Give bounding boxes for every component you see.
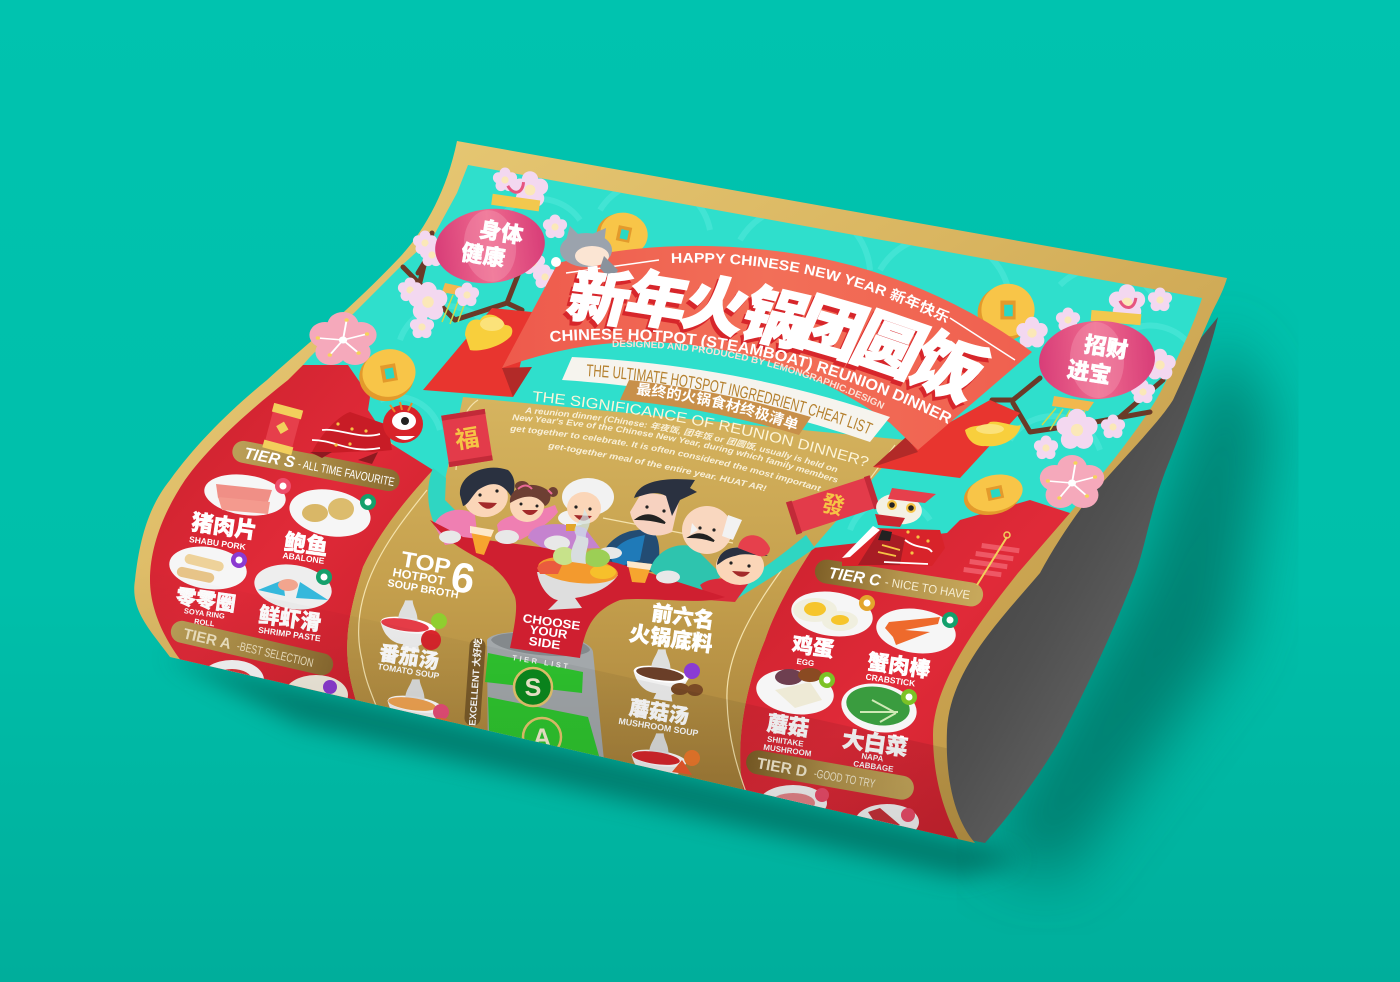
poster shadow bbox=[165, 330, 1270, 880]
label: soya ring roll: 零零圈 bbox=[174, 580, 238, 617]
heading: top 6 bbox=[388, 551, 474, 598]
title: Chinese characters: 圆 bbox=[839, 288, 945, 395]
body text: New Year's Eve of the Chinese New Year, during which family members bbox=[512, 414, 838, 482]
soup: mushroom: 蘑菇汤 bbox=[627, 692, 691, 730]
banner rules bbox=[566, 260, 1015, 360]
subtitle: CHINESE HOTPOT (STEAMBOAT) REUNION DINNER bbox=[550, 328, 952, 424]
label: soya ring roll bbox=[176, 586, 236, 626]
label: shrimp paste: 鲜虾滑 bbox=[257, 599, 323, 637]
lantern tassel: right bbox=[1042, 396, 1094, 432]
label: napa cabbage: 大白菜 bbox=[840, 722, 910, 763]
label: egg: 鸡蛋 bbox=[790, 628, 836, 664]
choose your side bbox=[522, 611, 581, 652]
lantern text: health bbox=[459, 212, 526, 273]
panel: right red tier list bbox=[740, 500, 1070, 842]
label: soya ring roll: ROLL bbox=[194, 617, 215, 628]
label: soya ring roll: SOYA RING bbox=[183, 606, 225, 621]
tan strip bbox=[620, 380, 811, 435]
tier S pill: - ALL TIME FAVOURITE bbox=[297, 457, 396, 489]
label: napa cabbage bbox=[842, 728, 908, 772]
label: shabu pork: SHABU PORK bbox=[188, 534, 247, 552]
gold border bbox=[134, 141, 1227, 843]
title: Chinese characters: 锅 bbox=[730, 264, 823, 363]
tier D pill: TIER D bbox=[755, 755, 808, 781]
tier C pill: TIER C bbox=[827, 565, 882, 590]
plate: napa cabbage bbox=[841, 684, 917, 732]
label: shrimp paste: SHRIMP PASTE bbox=[258, 625, 322, 643]
choose your side: SIDE bbox=[528, 634, 561, 652]
family bbox=[434, 468, 770, 602]
funnel and table bbox=[430, 520, 725, 658]
person: girl bbox=[497, 481, 558, 540]
firecracker bbox=[262, 403, 303, 455]
heading: significance: THE SIGNIFICANCE OF REUNION DINNER? bbox=[533, 391, 869, 466]
plate: egg bbox=[791, 592, 875, 636]
panel: teal header bbox=[303, 165, 1202, 560]
scroll: fa: 發 bbox=[819, 490, 847, 520]
scroll: fu: 福 bbox=[453, 424, 481, 455]
scale pattern bbox=[380, 181, 1190, 530]
soup: pumpkin bbox=[387, 679, 452, 722]
hotpot bbox=[537, 508, 619, 610]
plate: tier A partial bbox=[209, 660, 348, 698]
teal bowl rim right bbox=[737, 535, 815, 599]
lantern: right bbox=[1036, 297, 1157, 402]
soup: mushroom: MUSHROOM SOUP bbox=[618, 716, 699, 738]
plate: shrimp paste bbox=[254, 564, 332, 610]
excellent label: EXCELLENT 大好吃 bbox=[466, 637, 485, 726]
title: Chinese characters: 新 bbox=[560, 248, 642, 340]
soup: tomato bbox=[377, 600, 447, 681]
lantern text: health: 健康 bbox=[459, 235, 508, 273]
label: abalone: 鲍鱼 bbox=[282, 524, 330, 562]
blossoms bbox=[309, 168, 1176, 508]
person: father bbox=[600, 479, 697, 572]
tier list can: TIER LIST bbox=[512, 653, 571, 671]
body text: get-together meal of the entire year. HUAT AR! bbox=[548, 444, 767, 492]
person: boy bbox=[700, 535, 770, 602]
soup: tomato: 番茄汤 bbox=[377, 637, 441, 675]
lantern text: fortune: 进宝 bbox=[1065, 352, 1114, 390]
white strip bbox=[562, 357, 890, 442]
curled back of poster bbox=[925, 317, 1218, 843]
heading: top 6 chinese bbox=[628, 602, 713, 654]
tier D pill: -GOOD TO TRY bbox=[813, 766, 876, 791]
soup: tomato: TOMATO SOUP bbox=[377, 661, 440, 681]
cat bbox=[551, 226, 618, 283]
label: crabstick: CRABSTICK bbox=[865, 672, 917, 689]
tier A pill: -BEST SELECTION bbox=[236, 639, 315, 670]
label: shiitake: MUSHROOM bbox=[763, 743, 812, 758]
tier D pill bbox=[744, 748, 916, 802]
plate: crabstick bbox=[876, 608, 958, 654]
tier list can bbox=[485, 632, 605, 770]
tier A badge: A bbox=[533, 724, 551, 752]
plate: shabu pork bbox=[204, 474, 291, 516]
label: napa cabbage: CABBAGE bbox=[853, 759, 895, 774]
label: shiitake: 蘑菇 bbox=[765, 707, 811, 743]
white strip text: THE ULTIMATE HOTSPOT INGREDRIENT CHEAT LIST bbox=[586, 364, 874, 434]
lion left bbox=[310, 402, 423, 464]
poster bbox=[134, 141, 1227, 843]
title: Chinese characters bbox=[560, 248, 1008, 419]
person: grandfather bbox=[650, 506, 742, 597]
tier A pill bbox=[169, 619, 335, 677]
roll shading bbox=[100, 560, 1000, 860]
firecracker string bbox=[963, 532, 1020, 585]
teal bowl rim left bbox=[428, 468, 455, 522]
label: shiitake bbox=[764, 712, 812, 756]
heading: top 6: 6 bbox=[447, 553, 479, 603]
soup: mushroom bbox=[618, 649, 703, 738]
person: grandmother bbox=[528, 478, 614, 550]
title: Chinese characters: 火 bbox=[672, 253, 763, 350]
scroll: fu bbox=[441, 409, 493, 467]
lantern text: health: 身体 bbox=[477, 212, 526, 250]
tier S pill: TIER S bbox=[242, 445, 297, 472]
coin: lower left bbox=[355, 345, 420, 405]
label: crabstick: 蟹肉棒 bbox=[866, 646, 932, 684]
title: Chinese characters: 年 bbox=[617, 250, 701, 343]
coin: lower right bbox=[960, 470, 1027, 520]
body text: A reunion dinner (Chinese: 年夜饭, 团年饭 or 团圆饭, usually is held on bbox=[524, 408, 838, 472]
label: napa cabbage: NAPA bbox=[861, 752, 884, 764]
label: abalone: ABALONE bbox=[282, 550, 325, 566]
branches bbox=[403, 233, 1163, 432]
title banner bbox=[502, 246, 1032, 450]
gold ingot left bbox=[465, 315, 512, 350]
tier C pill bbox=[813, 558, 985, 608]
gold ingot right bbox=[965, 422, 1021, 446]
label: egg: EGG bbox=[796, 657, 815, 668]
plate: soya ring roll bbox=[169, 546, 247, 590]
tier S pill bbox=[230, 439, 402, 493]
coin: top left bbox=[592, 208, 652, 263]
heading: top 6 chinese: 前六名 bbox=[650, 597, 716, 635]
tan strip text: 最终的火锅食材终极清单 bbox=[636, 382, 798, 430]
lantern: left bbox=[429, 181, 549, 289]
tier S badge: S bbox=[525, 674, 541, 702]
tier C pill: - NICE TO HAVE bbox=[884, 575, 971, 602]
panel: left red tier list bbox=[150, 365, 433, 704]
tier A pill: TIER A bbox=[182, 625, 233, 653]
person: mother bbox=[434, 468, 515, 545]
label: shabu pork: 猪肉片 bbox=[189, 505, 259, 546]
lantern tassel: left bbox=[434, 283, 478, 324]
lion right bbox=[842, 488, 945, 566]
title: Chinese characters: 团 bbox=[784, 272, 884, 375]
tableware bbox=[439, 526, 680, 584]
label: shiitake: SHIITAKE bbox=[767, 735, 805, 749]
plate: abalone bbox=[289, 489, 376, 537]
ribbon tail right bbox=[873, 400, 1020, 478]
soup: spicy bbox=[631, 733, 700, 775]
heading: top 6: TOP bbox=[399, 546, 453, 580]
lantern text: fortune bbox=[1065, 327, 1131, 390]
heading: happy new year: HAPPY CHINESE NEW YEAR 新年快乐 bbox=[672, 253, 950, 323]
choose your side: YOUR bbox=[529, 622, 569, 642]
scroll: fa bbox=[786, 475, 880, 535]
heading: top 6: SOUP BROTH bbox=[386, 577, 459, 601]
heading: top 6: HOTPOT bbox=[391, 565, 447, 588]
choose your side: CHOOSE bbox=[522, 611, 581, 633]
body text: get together to celebrate. It is often considered the most important bbox=[510, 426, 822, 492]
title: Chinese characters: 饭 bbox=[894, 307, 1008, 419]
credit line: DESIGNED AND PRODUCED BY LEMONGRAPHIC.DESIGN bbox=[612, 340, 885, 409]
lantern text: fortune: 招财 bbox=[1082, 327, 1131, 365]
ribbon tail left bbox=[423, 308, 532, 397]
plate: tier D partial bbox=[759, 785, 919, 840]
panel: central gold bbox=[347, 397, 906, 797]
plate: shiitake bbox=[756, 668, 835, 714]
coin: top right bbox=[978, 284, 1035, 340]
heading: top 6 chinese: 火锅底料 bbox=[627, 617, 715, 659]
